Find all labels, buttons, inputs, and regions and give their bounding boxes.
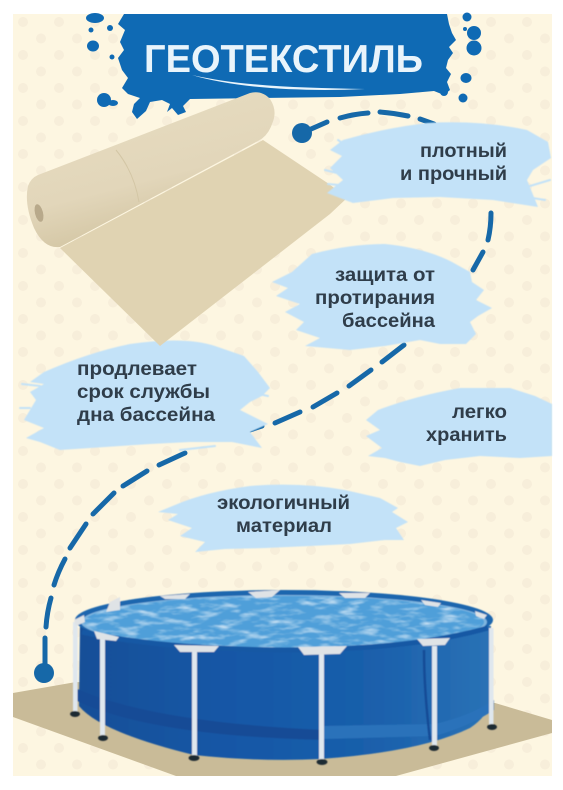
label: extends life: срок службы [77,382,210,403]
brush stroke: eco material [158,485,408,552]
label: easy to store: легко [452,402,507,423]
wall fold [424,650,430,740]
title banner [86,12,482,119]
front rim [82,628,488,650]
label: extends life: дна бассейна [77,405,215,426]
label: eco material [217,493,350,537]
title text: ГЕОТЕКСТИЛЬ [144,38,423,81]
unrolled sheet [60,140,347,346]
splash droplets [86,12,482,107]
brush stroke: easy to store [366,388,552,466]
label: abrasion protection [315,265,435,332]
brush stroke: abrasion protection [272,244,492,350]
title swoosh [192,75,365,90]
dashed connector line [34,112,491,683]
frame connectors [74,590,487,655]
inner back wall [81,595,487,649]
label: extends life [77,359,215,426]
label: extends life: продлевает [77,359,197,380]
marker: bottom dot [34,663,54,683]
brush stroke: dense and strong [325,122,551,207]
label: abrasion protection: протирания [315,288,435,309]
leg feet [70,711,497,765]
swimming pool [70,590,497,765]
label: abrasion protection: защита от [335,265,435,286]
dashes [45,112,491,664]
label: easy to store [426,402,507,446]
roll core [33,203,45,223]
label: dense and strong [400,141,507,185]
label: eco material: материал [236,516,332,537]
pool wall band right [324,700,494,739]
brush stroke: extends service life [20,340,270,450]
roll seam [116,150,139,202]
water [84,596,484,648]
marker: top dot [292,123,312,143]
geotextile roll [27,92,347,346]
banner paint splash [118,14,456,119]
ground mat [13,682,552,776]
back rim [75,590,493,650]
pool wall band left [75,688,324,740]
roll body [27,92,275,247]
label: eco material: экологичный [217,493,350,514]
label: easy to store: хранить [426,425,507,446]
pool wall [79,626,491,760]
frame legs [73,622,494,762]
label: dense and strong: плотный [420,141,507,162]
label: dense and strong: и прочный [400,164,507,185]
label: abrasion protection: бассейна [342,311,435,332]
